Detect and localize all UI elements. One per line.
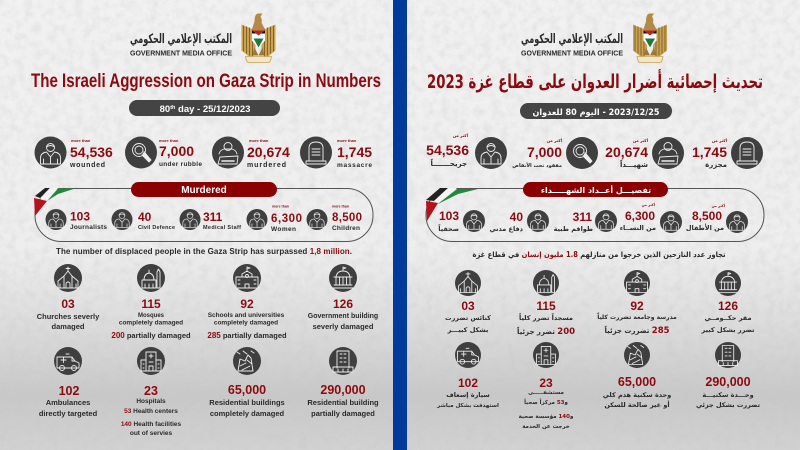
stat: hospitals: 23: [144, 384, 158, 398]
Arabic stat: residential partial: [696, 342, 760, 409]
date pill: day - 25/12/2023: [175, 104, 250, 115]
stat: government buildings: Government building: [308, 313, 378, 320]
stat: wounded: more than: [71, 138, 91, 143]
stat: children: Children: [332, 225, 360, 232]
Arabic stat: ambulances: [436, 342, 499, 409]
Arabic stat: journalists: صحفياً: [438, 224, 459, 233]
Arabic stat: government: تضرر بشكل كبير: [701, 326, 754, 334]
stat: mosques: completely damaged: [119, 320, 183, 326]
stat: residential partially damaged: [307, 347, 379, 418]
Arabic stat: under rubble: أكثر من: [547, 138, 563, 143]
stat: women: [246, 204, 302, 233]
stat: ambulances: Ambulances: [46, 398, 90, 407]
logo: Government Media Office Arabic side: GOVERNMENT MEDIA OFFICE: [521, 48, 623, 58]
Arabic stat: residential destroyed: وحدة سكنية هدم كلي: [603, 391, 671, 399]
stat: residential partially damaged: 290,000: [320, 383, 366, 397]
Arabic stat: schools: [597, 270, 677, 336]
stat: murdered: [212, 136, 290, 169]
Arabic stat: medical staff: 311: [573, 210, 592, 224]
Arabic stat: wounded: [426, 133, 507, 169]
Arabic stat: schools: مدرسة وجامعة تضررت كلياً: [597, 313, 677, 321]
stat: mosques: 200 partially damaged: [111, 331, 191, 340]
Arabic stat: martyrs: 20,674: [605, 144, 648, 160]
stat: murdered: murdered: [247, 162, 286, 169]
Arabic stat: hospitals: [519, 342, 574, 430]
stat: children: 8,500: [332, 212, 362, 224]
Arabic stat: massacre: مجزرة: [705, 161, 727, 169]
stat: journalists: [46, 209, 107, 231]
stat: ambulances: directly targeted: [39, 409, 98, 418]
Arabic stat: residential destroyed: أو غير صالحة للسكن: [604, 400, 670, 409]
Arabic stat: women: من النســاء: [620, 224, 656, 232]
Arabic stat: martyrs: شهيـــداً: [619, 159, 648, 169]
stat: hospitals: [121, 347, 182, 437]
stat: schools: [207, 264, 287, 340]
date pill: [129, 100, 280, 116]
Arabic stat: schools: 92: [630, 299, 644, 313]
panel: murdered breakdown: [33, 182, 373, 242]
Arabic stat: mosques: 115: [536, 299, 556, 313]
displaced note: The number of displaced people in the Gaza Strip has surpassed 1,8 million.: [56, 247, 352, 256]
stat: residential completely damaged: [209, 347, 285, 418]
stat: civil defence: Civil Defence: [138, 225, 175, 231]
date pill: 80: [160, 104, 170, 115]
stat: children: [306, 204, 362, 232]
stat: ambulances: 102: [59, 384, 79, 398]
Arabic stat: women: 6,300: [625, 209, 655, 223]
stat: residential completely damaged: 65,000: [228, 383, 266, 397]
stat: journalists: 103: [70, 210, 90, 224]
Arabic panel: martyrs breakdown: [426, 182, 764, 242]
stat: government buildings: severly damaged: [313, 322, 374, 331]
stat: wounded: [34, 136, 113, 169]
stat: children: more than: [332, 204, 349, 208]
stat: ambulances: [39, 347, 98, 418]
pill: Murdered: Murdered: [181, 185, 227, 196]
stat: civil defence: [112, 209, 175, 231]
Arabic stat: wounded: 54,536: [426, 142, 469, 158]
Arabic date pill: 2023/12/25 - اليوم 80 للعدوان: [532, 108, 660, 118]
Arabic stat: martyrs: [605, 137, 684, 169]
Arabic stat: churches: [445, 270, 491, 334]
Arabic stat: journalists: 103: [439, 209, 459, 223]
Arabic stat: hospitals: خرجت عن الخدمة: [522, 424, 570, 430]
stat: under rubble: 7,000: [159, 143, 194, 159]
flag ribbon: [33, 186, 75, 216]
Arabic stat: massacre: [692, 137, 763, 169]
stat: residential completely damaged: Residential buildings: [209, 398, 285, 407]
stat: mosques: 115: [141, 297, 161, 311]
Arabic stat: mosques: [516, 270, 575, 337]
Arabic stat: ambulances: سيارة إسعاف: [446, 391, 490, 399]
logo: Government Media Office: [130, 14, 276, 62]
pill: Murdered: [131, 182, 277, 197]
Arabic stat: civil defence: دفاع مدني: [489, 225, 524, 233]
logo: Government Media Office Arabic side: المكتب الإعلامي الحكومي: [521, 32, 623, 47]
Arabic stat: under rubble: [512, 137, 598, 169]
Arabic stat: martyrs: أكثر من: [633, 138, 649, 143]
Arabic stat: churches: بشكل كبيـــر: [447, 326, 488, 334]
Arabic stat: schools: 285 تضررت جزئياً: [604, 325, 670, 336]
stat: hospitals: 140 Health facilities: [121, 421, 182, 428]
stat: hospitals: Hospitals: [136, 398, 166, 405]
stat: mosques: [111, 264, 191, 340]
blue divider: [393, 0, 407, 450]
stat: women: more than: [272, 204, 289, 208]
Arabic stat: residential partial: تضررت بشكل جزئي: [696, 401, 760, 409]
stat: hospitals: 53 Health centers: [124, 408, 178, 415]
Arabic stat: wounded: جريحـــــــاً: [430, 158, 467, 168]
logo: Government Media Office: المكتب الإعلامي الحكومي: [130, 32, 232, 47]
Arabic stat: churches: 03: [461, 299, 475, 313]
Arabic stat: government: [701, 270, 754, 334]
stat: hospitals: out of servies: [130, 430, 173, 437]
Arabic stat: children: [686, 203, 748, 233]
Arabic stat: children: من الأطفال: [686, 223, 724, 232]
Arabic stat: residential partial: وحـــدة سكنيـــة: [702, 391, 754, 399]
Arabic stat: women: أكثر من: [642, 202, 655, 207]
stat: massacre: [300, 136, 372, 169]
Arabic stat: ambulances: استهدفت بشكل مباشر: [436, 402, 499, 409]
Arabic stat: residential partial: 290,000: [705, 375, 751, 389]
stat: wounded: 54,536: [70, 144, 113, 160]
stat: under rubble: under rubble: [159, 161, 202, 168]
stat: under rubble: [125, 136, 202, 168]
logo: Government Media Office Arabic side: [521, 14, 667, 62]
Arabic date pill: [520, 103, 672, 119]
stat: murdered: 20,674: [247, 144, 290, 160]
Arabic stat: children: أكثر من: [712, 203, 725, 208]
Arabic stat: journalists: [438, 209, 485, 233]
Arabic pill: [523, 182, 668, 197]
Arabic flag ribbon: [426, 188, 478, 221]
stat: mosques: Mosques: [138, 313, 165, 319]
Arabic stat: wounded: أكثر من: [453, 133, 469, 138]
stat: churches: damaged: [52, 322, 85, 331]
stat: government buildings: 126: [333, 297, 353, 311]
stat: medical staff: Medical Staff: [203, 225, 241, 231]
stat: massacre: massacre: [337, 162, 372, 169]
Arabic stat: children: 8,500: [692, 209, 722, 223]
stat: residential partially damaged: partially damaged: [311, 409, 375, 418]
stat: women: Women: [271, 226, 296, 233]
Arabic stat: under rubble: 7,000: [527, 144, 562, 160]
Arabic stat: ambulances: 102: [458, 376, 478, 390]
stat: churches: Churches severly: [37, 312, 100, 321]
Arabic stat: massacre: أكثر من: [712, 138, 728, 143]
stat: journalists: Journalists: [70, 224, 107, 231]
stat: residential partially damaged: Residential building: [307, 398, 379, 407]
stat: women: 6,300: [271, 213, 302, 225]
Arabic stat: hospitals: و53 مركزاً صحياً: [524, 398, 568, 406]
stat: schools: 92: [240, 297, 254, 311]
stat: murdered: more than: [249, 138, 269, 143]
stat: churches: [37, 264, 100, 331]
Arabic stat: women: [620, 202, 682, 233]
Arabic stat: government: مقر حكــومــي: [704, 314, 752, 322]
Arabic stat: mosques: مسجداً تضرر كلياً: [518, 313, 573, 322]
Arabic stat: residential destroyed: 65,000: [618, 375, 656, 389]
date pill: th: [170, 105, 176, 111]
stat: under rubble: more than: [159, 138, 179, 143]
logo: Government Media Office: GOVERNMENT MEDIA OFFICE: [130, 48, 232, 58]
Arabic stat: civil defence: [489, 210, 549, 233]
panel: English: [31, 14, 381, 437]
stat: civil defence: 40: [138, 210, 152, 224]
Arabic stat: hospitals: 23: [539, 376, 553, 390]
stat: massacre: 1,745: [337, 144, 372, 160]
Arabic stat: hospitals: مستشفـــــى: [528, 390, 564, 396]
stat: residential completely damaged: completely damaged: [210, 409, 285, 418]
stat: churches: 03: [61, 297, 75, 311]
title: The Israeli Aggression on Gaza Strip in Numbers: [31, 70, 381, 92]
stat: massacre: more than: [337, 138, 357, 143]
Arabic stat: residential destroyed: [603, 342, 671, 409]
panel: Arabic: [426, 14, 764, 430]
stat: government buildings: [308, 264, 378, 331]
stat: medical staff: [180, 209, 241, 231]
Arabic stat: mosques: 200 تضرر جزئياً: [516, 326, 575, 337]
stat: schools: Schools and universities: [208, 312, 285, 319]
Arabic stat: hospitals: و140 مؤسسة صحية: [519, 414, 574, 420]
Arabic stat: medical staff: طواقم طبية: [554, 225, 593, 233]
Arabic stat: churches: كنائس تضررت: [445, 314, 491, 322]
Arabic stat: medical staff: [554, 210, 617, 233]
Arabic stat: government: 126: [718, 299, 738, 313]
Arabic stat: civil defence: 40: [510, 210, 523, 224]
stat: medical staff: 311: [203, 210, 223, 224]
Arabic stat: massacre: 1,745: [692, 144, 727, 160]
stat: schools: 285 partially damaged: [207, 331, 287, 340]
stat: schools: completely damaged: [214, 320, 278, 326]
stat: wounded: wounded: [69, 162, 105, 169]
Arabic displaced note: تجاوز عدد النازحين الذين خرجوا من منازلهم 1.8 مليون إنسان في قطاع غزة: [472, 250, 726, 259]
Arabic pill: تفصيـــل أعــداد الشهـــــداء: [541, 185, 651, 195]
Arabic stat: under rubble: مفقود تحت الأنقاض: [512, 162, 562, 169]
